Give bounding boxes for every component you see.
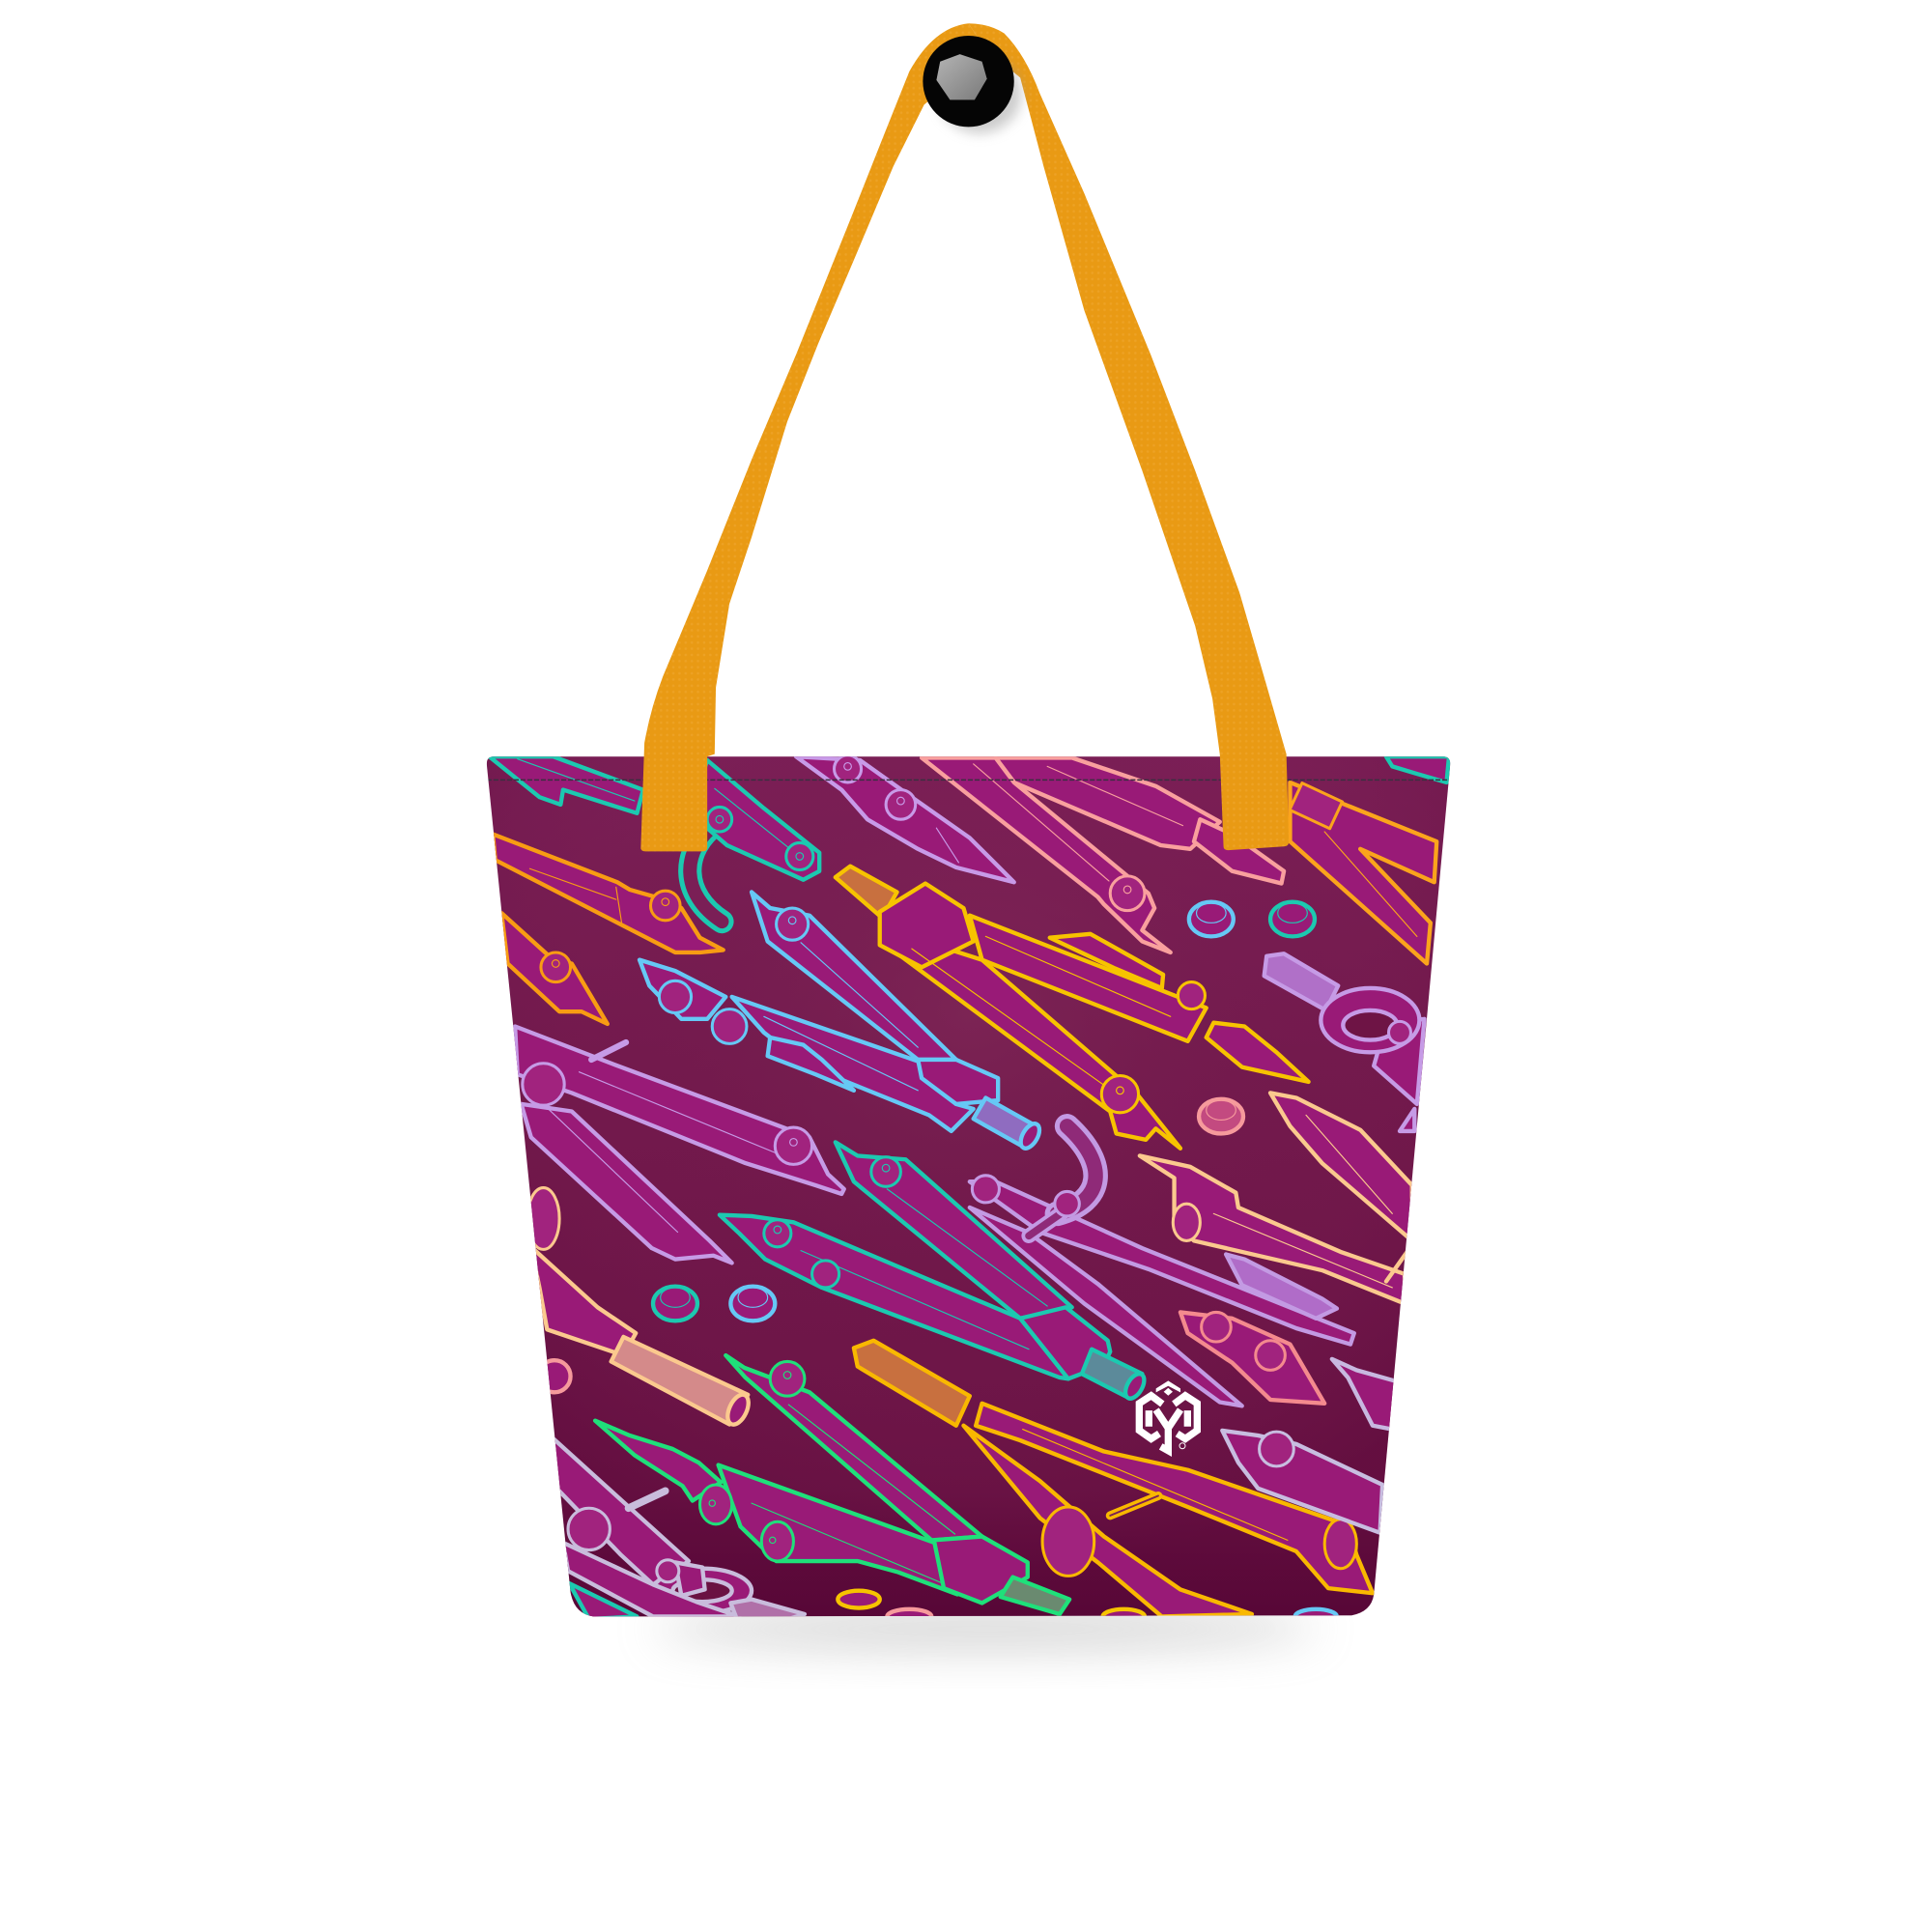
peach compass right upper xyxy=(1270,1093,1412,1240)
stitch line xyxy=(487,779,1450,781)
teal compass with arc xyxy=(690,760,819,922)
knob teal top xyxy=(1270,902,1315,936)
blue compass xyxy=(639,892,1043,1151)
teal compass centre xyxy=(720,1142,1148,1402)
teal fragment bottom left xyxy=(569,1583,637,1619)
orange compass leg left xyxy=(501,913,608,1024)
tote bag product illustration xyxy=(487,23,1451,1667)
pale lilac compass bottom left xyxy=(547,1433,805,1619)
strap left xyxy=(640,23,985,851)
pale lilac compass right xyxy=(1222,1431,1382,1533)
knob pink bottom edge xyxy=(885,1607,933,1616)
lilac pen top centre xyxy=(796,755,1014,882)
orange compass top right xyxy=(1290,782,1436,963)
knob teal lower xyxy=(653,1287,697,1321)
lilac compass with arc xyxy=(970,1126,1354,1406)
knob blue bottom edge xyxy=(1293,1607,1339,1615)
knob blue top xyxy=(1189,902,1234,936)
green compass xyxy=(595,1355,1069,1614)
peach compass lower left xyxy=(527,1188,753,1428)
wall pin xyxy=(923,36,1021,133)
orange pen compass top left xyxy=(493,835,724,952)
logo xyxy=(1139,1380,1197,1451)
knob blue lower xyxy=(730,1287,775,1321)
pale lilac pen right xyxy=(1332,1359,1396,1430)
lilac handle ring right xyxy=(1264,953,1424,1131)
bag body xyxy=(480,752,1457,1624)
knob yellow bottom edge xyxy=(1101,1607,1147,1616)
yellow compass bottom right xyxy=(854,1341,1373,1616)
peach compass right lower xyxy=(1140,1155,1407,1303)
large yellow compass xyxy=(836,867,1309,1149)
knob coral left xyxy=(538,1360,571,1392)
strap right xyxy=(969,23,1289,850)
pink compass top xyxy=(922,757,1284,952)
teal compass fragment top left xyxy=(489,756,643,813)
knob coral middle xyxy=(1199,1099,1243,1133)
small knobs xyxy=(538,902,1337,1624)
lilac large compass left xyxy=(515,1026,844,1263)
coral small pen xyxy=(1180,1312,1324,1404)
knob yellow bottom xyxy=(838,1591,880,1608)
teal fragment top right xyxy=(1386,756,1449,782)
bag shadow xyxy=(653,1609,1319,1649)
